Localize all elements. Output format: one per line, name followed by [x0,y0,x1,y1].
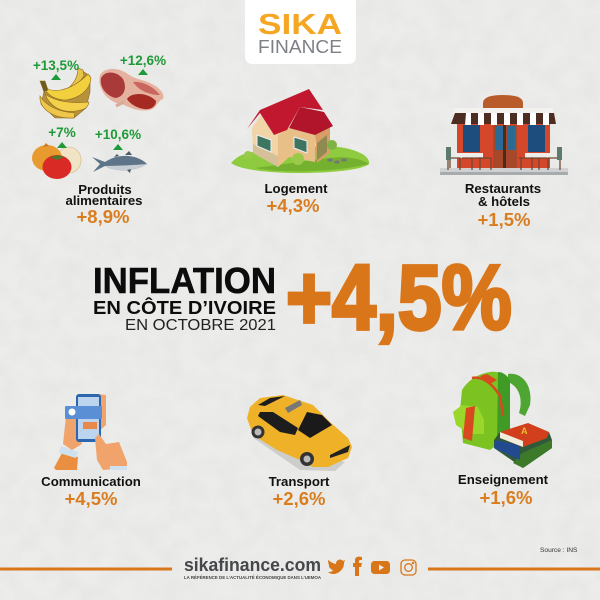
label: housing: Logement [264,181,328,196]
food sub-item labels [33,53,166,150]
icon: onions and tomato [32,143,81,179]
panel: transport [247,395,352,509]
value: education: +1,6% [480,487,532,508]
icon: house [231,89,369,173]
food sub-item labels: +13,5% [33,58,79,73]
icon: instagram [401,560,416,575]
icon: twitter [328,560,345,574]
food sub-item labels: +7% [48,125,76,140]
panel: education [453,372,552,508]
icon: youtube [371,561,390,574]
headline value: +4,5% [286,245,512,349]
label: education: Enseignement [458,472,549,487]
label: transport: Transport [269,474,330,489]
label: communication: Communication [41,474,141,489]
logo: FINANCE [258,36,342,57]
food sub-item labels: +10,6% [95,127,141,142]
label: food products: Produits [78,182,132,197]
icon: phone in hands [54,394,127,470]
icon: facebook [353,557,362,576]
icon: restaurant [440,95,568,175]
logo [245,0,356,64]
label: restaurants: Restaurants [465,181,541,196]
value: food products: +8,9% [77,206,129,227]
panel: restaurants [440,95,568,230]
value: housing: +4,3% [267,195,319,216]
source: Source : INS [540,547,578,554]
tagline: LA RÉFÉRENCE DE L’ACTUALITÉ ÉCONOMIQUE DANS L’UEMOA [184,573,322,580]
icon: bananas [40,68,91,118]
icon: fish [92,151,147,173]
icon: backpack and books: A [521,426,528,436]
food sub-item labels: +12,6% [120,53,166,68]
website: sikafinance.com [184,554,321,575]
icon: taxi [247,395,352,471]
title: EN OCTOBRE 2021 [125,317,276,334]
title: EN CÔTE D’IVOIRE [93,297,276,318]
label: restaurants: & hôtels [478,194,530,209]
value: transport: +2,6% [273,488,325,509]
panel: food products [32,53,166,227]
panel: communication [41,394,141,509]
logo: SIKA [258,9,342,41]
value: communication: +4,5% [65,488,117,509]
label: food products: alimentaires [66,193,142,208]
panel: housing [231,89,369,216]
value: restaurants: +1,5% [478,209,530,230]
title: INFLATION [93,260,276,301]
icon: meat [99,69,163,111]
title [93,260,276,334]
footer [0,554,600,580]
